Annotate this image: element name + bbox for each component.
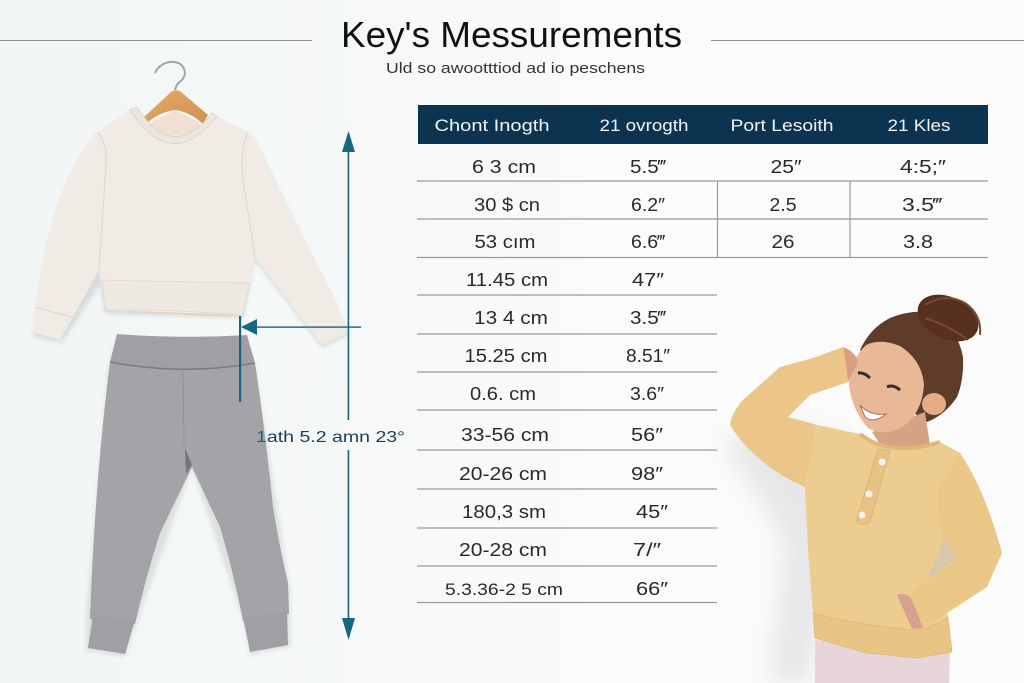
table fourth column [900, 157, 947, 252]
table first column: 6 3 cm [472, 157, 536, 177]
child hair [860, 312, 963, 422]
table second column: 7/″ [633, 540, 662, 560]
child hair bun [910, 285, 986, 351]
table third column: 26 [772, 232, 794, 252]
dimension label: 1ath 5.2 amn 23° [256, 429, 405, 446]
child neck [872, 412, 930, 452]
table first column [445, 157, 563, 599]
child hand in pocket [897, 594, 923, 629]
table fourth column: 4:5;″ [900, 157, 947, 177]
child lower arm [907, 453, 1002, 628]
subtitle: Uld so awootttiod ad io peschens [386, 60, 645, 77]
pants waistband [110, 334, 255, 369]
table header: 21 ovrogth [600, 116, 688, 135]
child collar [860, 434, 940, 448]
child face [849, 342, 924, 432]
table third column: 25″ [770, 157, 802, 177]
pants shadow [86, 336, 291, 657]
icon: wooden hanger [143, 90, 208, 124]
table second column [626, 157, 671, 599]
sleeve seams [35, 132, 255, 318]
sweater inner neck [150, 110, 205, 135]
table first column: 20-26 cm [459, 464, 547, 484]
sweater hem lining [125, 306, 234, 317]
photo: smiling child [722, 285, 1002, 683]
sweater collar [130, 107, 217, 144]
table: measurements [417, 105, 988, 602]
table header: Chont Inogth [434, 116, 550, 135]
sweater sleeves and body [32, 107, 347, 345]
table fourth column: 3.5‴ [902, 195, 943, 215]
table fourth column: 3.8 [903, 232, 933, 252]
table second column: 3.5‴ [630, 308, 667, 328]
table first column: 53 cım [474, 232, 536, 252]
table second column: 8.51″ [626, 346, 671, 366]
child fingers [843, 347, 858, 382]
table third column [770, 157, 802, 252]
table third column: 2.5 [770, 195, 796, 215]
pants left cuff [88, 615, 135, 654]
table second column: 56″ [631, 425, 664, 445]
title rules [0, 40, 1024, 42]
table second column: 47″ [632, 270, 665, 290]
illustration: sweater on hanger [32, 62, 349, 348]
arrow: horizontal waist dimension [239, 316, 361, 402]
table second column: 3.6″ [630, 384, 665, 404]
child eyes [858, 373, 900, 390]
arrow: vertical length dimension [342, 131, 355, 640]
table first column: 180,3 sm [462, 502, 546, 522]
table rules [417, 181, 988, 602]
table second column: 6.2″ [631, 195, 666, 215]
crotch shadow [185, 448, 192, 474]
table first column: 20-28 cm [459, 540, 547, 560]
child leggings [815, 640, 950, 683]
table second column: 66″ [636, 579, 669, 599]
table first column: 13 4 cm [474, 308, 548, 328]
table first column: 30 $ cn [474, 195, 540, 215]
child smile [860, 405, 886, 420]
pants right cuff [243, 612, 288, 652]
table header: 21 Kles [888, 116, 950, 135]
table first column: 33-56 cm [461, 425, 549, 445]
table first column: 5.3.36-2 5 cm [445, 580, 563, 599]
table second column: 6.6‴ [631, 232, 666, 252]
table second column: 5.5‴ [630, 157, 667, 177]
sweater shadow [32, 134, 349, 348]
child raised arm [730, 347, 848, 487]
child wall shadow [722, 425, 850, 683]
child buttons [858, 458, 886, 518]
child hem [813, 613, 952, 658]
child placket [856, 449, 890, 524]
child sweater body [805, 425, 975, 658]
table first column: 15.25 cm [464, 346, 548, 366]
child ear [922, 393, 946, 415]
table second column: 45″ [636, 502, 669, 522]
illustration: grey pants [86, 334, 291, 657]
gap under arm [927, 538, 957, 578]
title: Key's Messurements [341, 14, 682, 55]
table header [418, 105, 988, 144]
table second column: 98″ [631, 464, 664, 484]
sweater hem band [102, 280, 250, 315]
table header: Port Lesoith [730, 116, 834, 135]
table first column: 11.45 cm [466, 270, 548, 290]
pants legs [90, 362, 289, 624]
table first column: 0.6. cm [470, 384, 536, 404]
icon: hanger hook [155, 62, 185, 90]
